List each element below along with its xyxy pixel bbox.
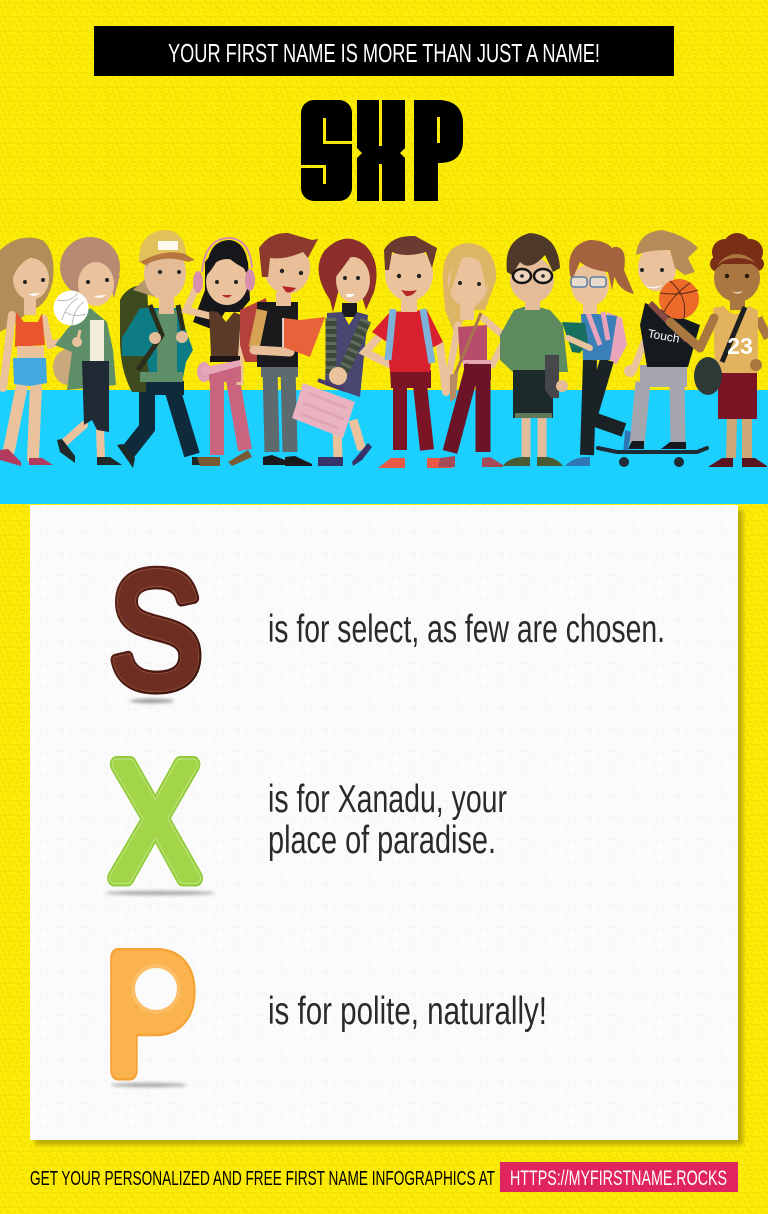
icon: letter S: S — [109, 538, 203, 723]
person 11: skateboarder: Touch — [647, 326, 681, 346]
text: X line — [268, 778, 507, 862]
person 4: girl with headphones — [186, 238, 255, 466]
header banner: YOUR FIRST NAME IS MORE THAN JUST A NAME! — [168, 38, 600, 68]
title: SXP — [300, 99, 451, 202]
footer text: GET YOUR PERSONALIZED AND FREE FIRST NAME INFOGRAPHICS AT — [30, 1168, 495, 1190]
cyan band — [0, 390, 768, 504]
person 5: boy reading a book — [240, 233, 325, 466]
person 3: boy with cap and backpack — [117, 230, 220, 468]
text: X line: is for Xanadu, your — [268, 778, 507, 821]
person 9: boy with glasses and laptop — [500, 233, 568, 466]
person 6: girl with pink bag — [292, 239, 377, 466]
person 1: girl in orange top — [0, 238, 78, 466]
panel: white letters card — [30, 505, 738, 1140]
person 12: boy with bag and basketball: 23 — [727, 333, 753, 359]
icon: letter X: X — [111, 729, 199, 913]
icon: letter P: P — [107, 922, 195, 1106]
icon: letter X: X — [111, 729, 199, 913]
person 11: skateboarder — [598, 230, 707, 467]
title: SXP: P — [421, 103, 451, 201]
text: P line: is for polite, naturally! — [268, 990, 547, 1033]
icon: letter S: S — [109, 538, 203, 723]
basketball — [659, 279, 699, 319]
icon: letter P: P — [107, 922, 195, 1106]
person 2: girl in green jacket with volleyball — [53, 237, 122, 465]
illustration: group of people — [0, 230, 768, 468]
text: X line: place of paradise. — [268, 819, 496, 862]
icon: letter X: X — [111, 729, 199, 913]
header banner — [94, 26, 674, 76]
title: SXP: X — [365, 103, 397, 201]
person 10: girl with tablet and ponytail — [562, 240, 634, 466]
person 8: blonde girl — [438, 243, 506, 467]
footer url badge — [500, 1162, 738, 1192]
title: SXP: S — [311, 103, 342, 201]
icon: letter S: S — [109, 538, 203, 723]
person 7: boy in red shirt — [365, 236, 453, 468]
person 12: boy with bag and basketball — [670, 233, 768, 467]
